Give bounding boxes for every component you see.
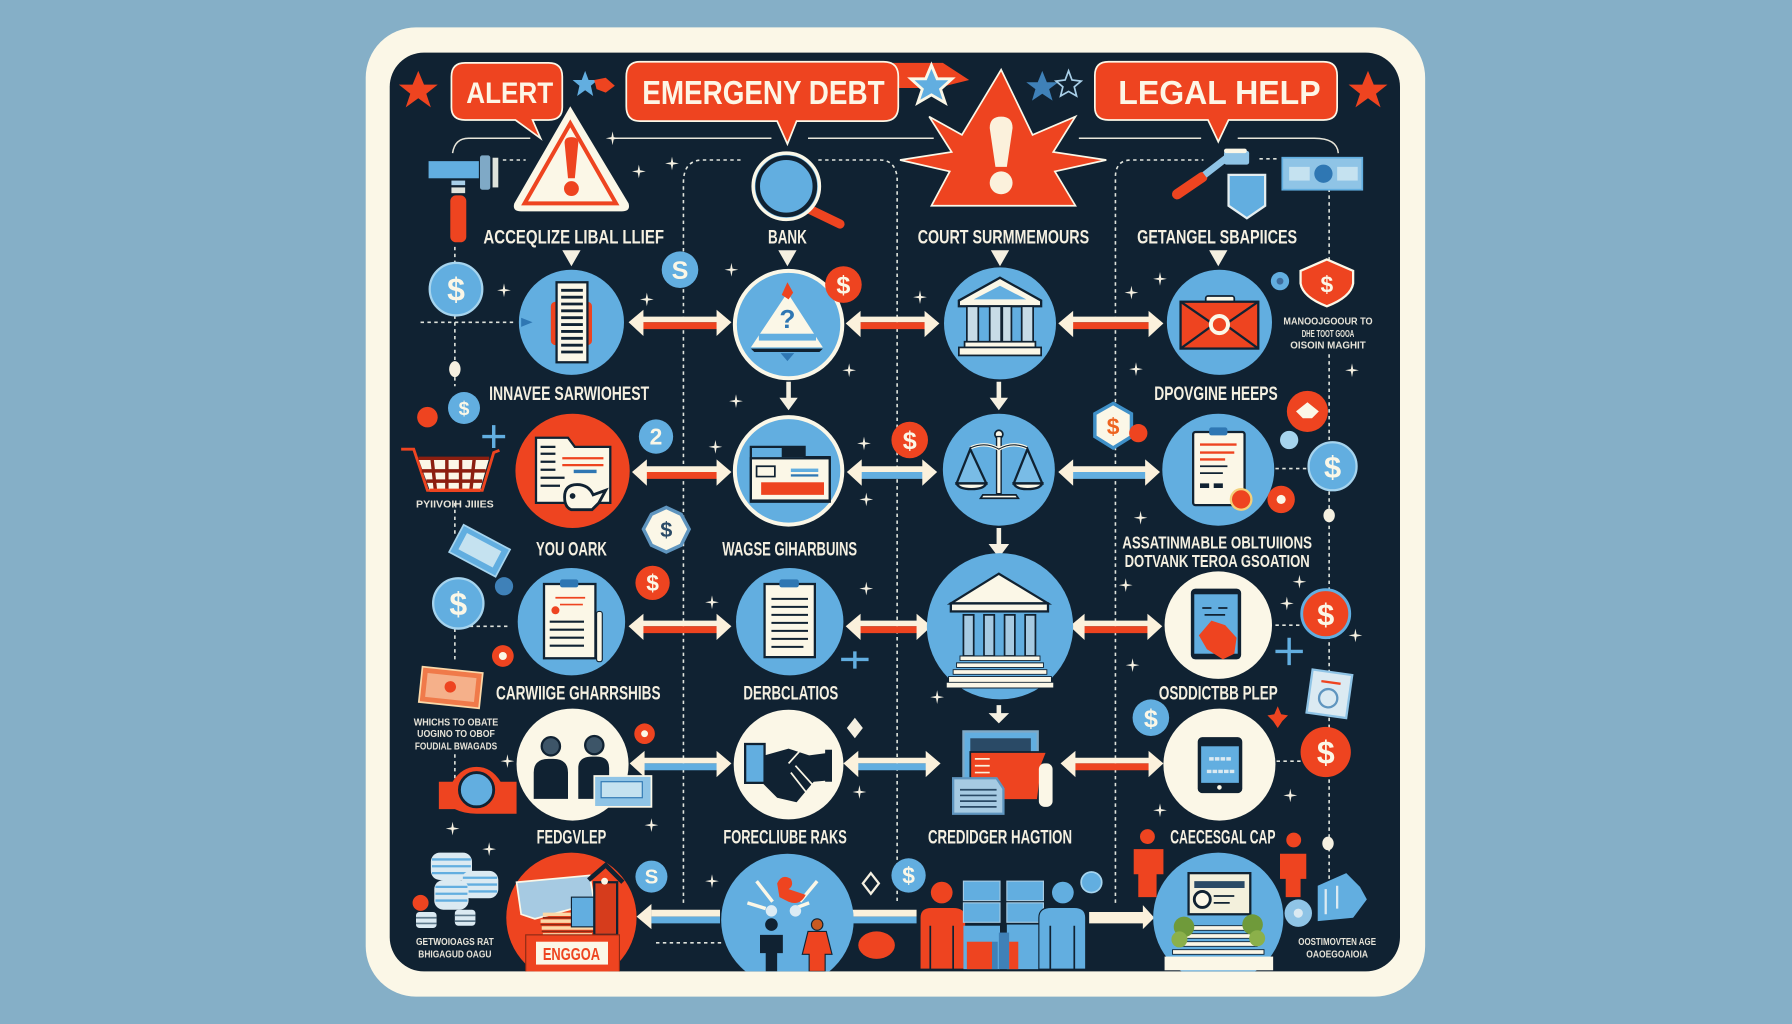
panel: cream frame (366, 27, 1425, 997)
icon: right red star (1349, 71, 1387, 107)
node: server racks (963, 881, 1043, 969)
icon: blue badge (1229, 175, 1265, 218)
icon: dollar coins: $ (459, 398, 470, 420)
node: clipboard with pen (518, 568, 625, 675)
node: phone with red hands (1165, 571, 1272, 679)
icon: dollar coins: $ (836, 272, 850, 300)
labels row 4: CARWIIGE GHARRSHIBS (496, 682, 661, 704)
icon: dollar coins: S (645, 865, 658, 888)
labels row 3: DOTVANK TEROA GSOATION (1125, 551, 1310, 571)
labels row 4 (496, 682, 1278, 704)
icon: left hammer (429, 155, 498, 242)
node: red envelope (1167, 270, 1272, 375)
node: blue person (1039, 882, 1086, 969)
icon: badge with red dot (1095, 403, 1147, 448)
node: wage folder (735, 417, 842, 525)
labels row 4: DERBCLATIOS (743, 682, 838, 704)
icon: blue stars right (1026, 71, 1081, 101)
small notes: OOSTIMOVTEN AGE (1298, 937, 1376, 948)
labels row 1: ACCEQLIZE LIBAL LLIEF (483, 226, 664, 248)
labels row 1 (483, 226, 1297, 248)
icon: red figures beside dome (1134, 829, 1306, 897)
labels row 5: FEDGVLEP (537, 826, 606, 848)
node: red dome with debts (506, 853, 637, 983)
labels row 3 (536, 533, 1312, 571)
horizontal arrows row 3 (629, 614, 1162, 640)
labels row 3: WAGSE GIHARBUINS (722, 538, 857, 560)
labels row 1: BANK (768, 226, 807, 248)
node: large courthouse (927, 553, 1073, 699)
node: declaration clipboard (736, 568, 843, 675)
icon: dollar coins: $ (449, 586, 467, 622)
node: clipboard with seal (1162, 414, 1274, 526)
node: bank question triangle (735, 271, 842, 378)
icon: coin stacks (416, 853, 498, 928)
icon: dollar coins: $ (1324, 450, 1341, 485)
icon: dollar coins: $ (1317, 597, 1334, 632)
icon: dollar coins: $ (1317, 734, 1335, 770)
emergency debt red flag (891, 63, 969, 88)
icons: small flowers on lines (449, 361, 1335, 850)
small notes: FOUDIAL BWAGADS (415, 742, 497, 753)
small notes: OAOEGOAIOIA (1306, 950, 1368, 961)
node: blue dome with certificate and steps (1153, 853, 1283, 983)
icon: blue plus marks (482, 425, 1303, 669)
small notes: UOGINO TO OBOF (417, 729, 495, 740)
icon: blue banknote stack (449, 525, 510, 577)
icon: shopping basket (401, 449, 499, 490)
icon: dollar coins: $ (903, 427, 917, 455)
emergency debt bubble (626, 62, 898, 144)
icon: octagon seal: $ (660, 517, 672, 542)
icon: right hammer (1177, 149, 1249, 194)
icon: dollar coins: $ (1144, 705, 1158, 733)
legal help bubble: LEGAL HELP (1118, 75, 1321, 112)
small notes: OISOIN MAGHIT (1290, 341, 1366, 352)
small notes: BHIGAGUD OAGU (418, 950, 491, 961)
horizontal arrows row 4 (630, 751, 1163, 777)
vertical arrows (562, 250, 1227, 723)
labels row 1: GETANGEL SBAPIICES (1137, 226, 1297, 248)
icon: diamonds (847, 718, 879, 894)
icon: dollar coins: $ (902, 862, 915, 888)
horizontal arrows row 1 (629, 310, 1163, 337)
node: courthouse (944, 267, 1056, 379)
icon: red shield: $ (1320, 272, 1333, 298)
icon: small blue star and arrow (573, 71, 615, 96)
labels row 2: DPOVGINE HEEPS (1154, 383, 1278, 405)
legal help bubble (1095, 62, 1337, 142)
icon: warning triangle (514, 106, 629, 211)
small notes: GETWOIOAGS RAT (416, 937, 494, 948)
icon: dollar coins: S (672, 257, 688, 285)
icon: red banknote (419, 667, 483, 708)
labels row 5: CREDIDGER HAGTION (928, 826, 1072, 848)
emergency debt bubble: EMERGENY DEBT (642, 75, 885, 112)
icon: left red star (399, 71, 438, 107)
node: red creditor person (920, 882, 966, 969)
node: creditor folders (953, 731, 1053, 814)
icon: octagon seal (643, 507, 689, 552)
labels row 2: INNAVEE SARWIOHEST (489, 383, 649, 405)
small notes: MANOOJGOOUR TO (1283, 317, 1373, 328)
icon: outlined blue star (911, 65, 952, 103)
icon: red shield (1301, 259, 1353, 306)
horizontal arrows row 2 (632, 459, 1160, 486)
icon: badge with red dot: $ (1107, 413, 1120, 439)
labels row 5: FORECLIUBE RAKS (723, 826, 847, 848)
labels row 1: COURT SURMMEMOURS (918, 226, 1089, 248)
icon: card with mark (1307, 669, 1352, 718)
node: red dome with debts: ENGGOA (543, 944, 600, 964)
node: blue dome with people (721, 854, 854, 972)
labels row 3: ASSATINMABLE OBLTUIIONS (1122, 533, 1312, 553)
labels row 3: YOU OARK (536, 538, 607, 560)
icon: sparkles (446, 131, 1362, 888)
icon: small red star (1267, 706, 1288, 728)
icon: dollar coins: $ (447, 272, 465, 308)
alert bubble (451, 63, 562, 138)
small notes: WHICHS TO OBATE (414, 718, 498, 729)
icon: red pumpkin (858, 931, 895, 959)
icon: dollar coins (413, 251, 1357, 927)
node: handshake (734, 710, 843, 819)
node: garnishment document (519, 270, 624, 375)
alert bubble: ALERT (466, 77, 553, 110)
panel: dark flowchart board (390, 53, 1400, 971)
node: bank question triangle: ? (779, 304, 795, 334)
small notes: PYIIVOIH JIIIES (416, 499, 494, 510)
small notes: DHE TOOT GOOA (1302, 329, 1355, 340)
icon: dollar coins: 2 (650, 424, 662, 450)
icon: magnifying glass (753, 153, 840, 224)
labels row 5: CAECESGAL CAP (1170, 826, 1275, 848)
labels row 2 (489, 383, 1278, 405)
icon: blue tag (1318, 873, 1367, 921)
node: red folder and key (515, 414, 630, 528)
icon: red starburst alert (900, 70, 1106, 206)
icon: blue banknote (1282, 158, 1362, 190)
node: tablet (1163, 709, 1275, 821)
icon: dollar coins: $ (646, 570, 659, 596)
horizontal arrows row 5 (637, 904, 1154, 929)
labels row 4: OSDDICTBB PLEP (1159, 682, 1278, 704)
node: scales of justice (943, 414, 1055, 526)
icon: red camera band (439, 767, 517, 814)
labels row 5 (537, 826, 1275, 848)
small notes (414, 317, 1376, 961)
node: two people with banknote (517, 709, 651, 821)
